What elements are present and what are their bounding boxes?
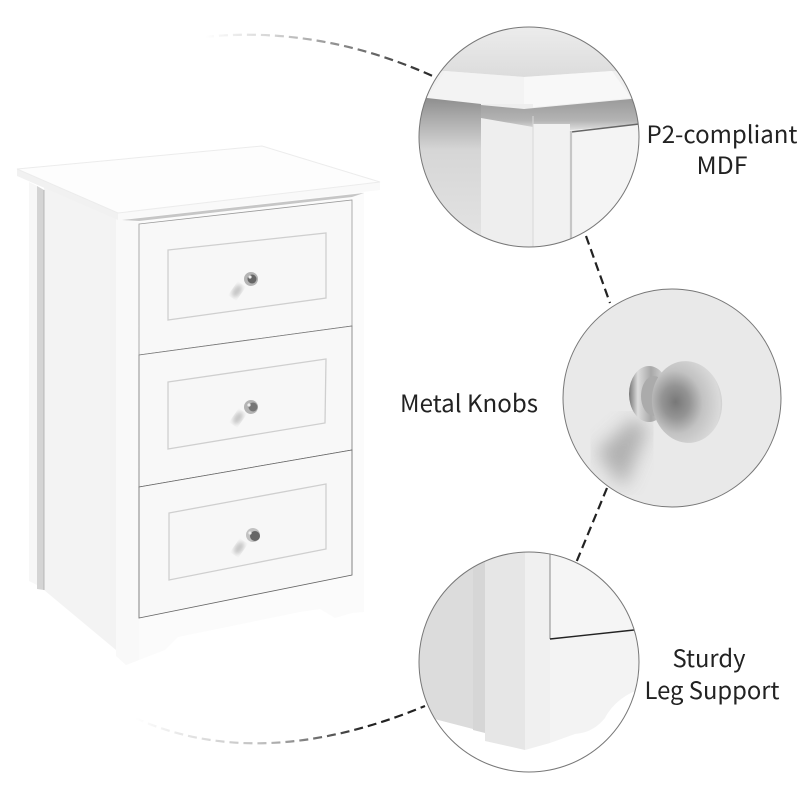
drawer 2 <box>139 326 352 487</box>
knob stem <box>641 376 667 416</box>
drawer 3 knob shadow <box>232 540 246 556</box>
drawer 3 knob <box>246 528 260 542</box>
knob shadow <box>596 418 648 488</box>
dashed arc: bottom <box>135 706 425 743</box>
leg front <box>525 552 550 750</box>
drawer vertical edge <box>550 554 551 639</box>
label: P2-compliant MDF: P2-compliant <box>646 115 798 150</box>
knob dome <box>647 357 727 447</box>
column seam <box>532 116 534 246</box>
drawer face <box>634 125 638 126</box>
drawer 2 knob shadow <box>231 410 245 426</box>
nightstand cabinet <box>17 146 380 665</box>
table top <box>17 146 380 220</box>
drawer 1 knob shadow <box>230 283 244 299</box>
front left leg <box>116 218 139 665</box>
top surface <box>442 40 616 77</box>
middle column <box>524 104 533 108</box>
leg side <box>485 552 525 750</box>
drawer 2 inset panel <box>168 359 326 449</box>
drawer 2 knob <box>244 400 258 414</box>
drawer side edge <box>570 131 572 247</box>
label: Sturdy Leg Support: Sturdy <box>672 639 746 674</box>
side panel <box>44 183 116 650</box>
shadow band under board <box>481 99 639 130</box>
left column <box>419 98 481 247</box>
drawer 1 inset panel <box>168 233 326 320</box>
circle outline <box>419 27 639 247</box>
rear leg strip <box>29 182 44 590</box>
drawer 3 <box>139 450 352 618</box>
label: P2-compliant MDF <box>646 115 798 181</box>
drawer bottom edge <box>550 630 634 639</box>
dashed connector: knob to leg circle <box>576 488 607 563</box>
label: Metal Knobs: Metal Knobs <box>400 384 538 419</box>
right frame <box>534 124 570 130</box>
label: Sturdy Leg Support <box>644 639 780 706</box>
drawer face <box>550 555 633 638</box>
front frame <box>116 190 364 665</box>
label: Sturdy Leg Support: Leg Support <box>644 671 780 706</box>
circle outline <box>563 289 781 507</box>
apron <box>550 630 640 743</box>
drawer edges <box>571 124 639 132</box>
drawer 3 inset panel <box>169 484 326 580</box>
side face <box>419 552 473 729</box>
dashed arc: top <box>205 35 437 78</box>
detail circle: metal knob <box>563 289 781 507</box>
side face dark strip <box>473 552 485 733</box>
dashed connector: top to knob circle <box>586 236 610 303</box>
label: P2-compliant MDF: MDF <box>696 146 748 181</box>
board edge right <box>528 71 612 77</box>
drawer 1 knob <box>244 272 258 286</box>
detail circle: top corner <box>419 27 639 247</box>
knob base <box>629 366 669 422</box>
detail circle: leg support <box>419 552 640 772</box>
board edge left <box>427 71 524 108</box>
shadow under top <box>122 193 364 221</box>
drawer 1 <box>139 200 352 355</box>
circle outline <box>419 552 639 772</box>
